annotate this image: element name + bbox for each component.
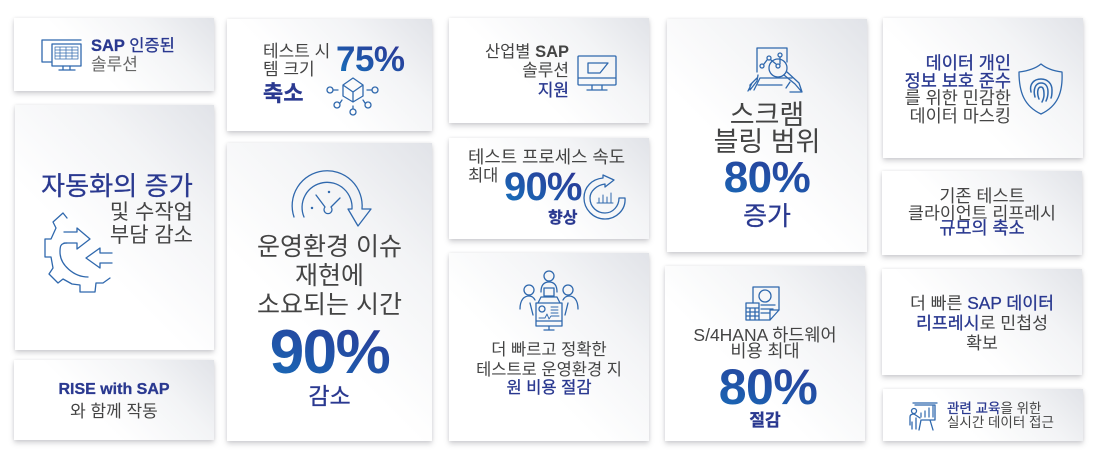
panel: faster SAP data refresh	[882, 269, 1082, 375]
panel: test process speed 90%	[449, 138, 649, 239]
text: 솔루션: 솔루션	[522, 61, 569, 80]
text: 테스트 프로세스 속도: 테스트 프로세스 속도	[468, 147, 625, 167]
text: 재현에: 재현에	[295, 262, 364, 290]
panel: test system size reduction 75%	[227, 19, 432, 131]
number: 80%	[668, 362, 868, 412]
text: 증가: 증가	[743, 201, 791, 231]
text: 기존 테스트: 기존 테스트	[939, 186, 1025, 206]
text: 데이터 마스킹: 데이터 마스킹	[910, 106, 1011, 126]
text: 및 수작업: 및 수작업	[110, 201, 193, 224]
icon: circular arrow with chart	[583, 174, 626, 220]
text: 운영환경 이슈: 운영환경 이슈	[257, 233, 402, 261]
text: 확보: 확보	[966, 333, 998, 353]
text: 와 함께 작동: 와 함께 작동	[70, 402, 158, 421]
panel: existing test client refresh	[882, 171, 1082, 255]
text: 데이터 개인: 데이터 개인	[926, 53, 1011, 73]
heading: 자동화의 증가: 자동화의 증가	[41, 171, 193, 201]
panel: issue reproduction time 90%	[227, 143, 432, 441]
number: 90%	[227, 322, 432, 384]
panel: S/4HANA hardware cost 80%	[665, 266, 865, 441]
text: 테스트 시: 테스트 시	[263, 42, 330, 61]
panel: real-time data access for training	[883, 389, 1083, 441]
panel: operations support cost savings	[449, 253, 649, 441]
icon: fingerprint shield	[1018, 63, 1063, 115]
text: 비용 최대: 비용 최대	[730, 341, 800, 361]
text: 실시간 데이터 접근: 실시간 데이터 접근	[947, 415, 1054, 430]
text: 더 빠른 SAP 데이터: 더 빠른 SAP 데이터	[910, 293, 1054, 313]
text: 블링 범위: 블링 범위	[714, 127, 820, 157]
number: 80%	[667, 156, 867, 200]
text: 테스트로 운영환경 지: 테스트로 운영환경 지	[476, 361, 622, 379]
icon: team around monitor	[519, 270, 579, 331]
text: 를 위한 민감한: 를 위한 민감한	[905, 88, 1011, 108]
text: 관련 교육을 위한: 관련 교육을 위한	[947, 401, 1041, 416]
text: 향상: 향상	[548, 210, 577, 227]
panel: sensitive data masking	[883, 18, 1083, 158]
text: 지원: 지원	[538, 81, 569, 100]
panel: scrum blur scope 80%	[667, 19, 867, 252]
icon: cube network	[326, 77, 379, 116]
text: 원 비용 절감: 원 비용 절감	[506, 379, 592, 397]
number: 80%: 80%	[724, 153, 810, 202]
number: 75%: 75%	[336, 40, 405, 79]
number: 90%: 90%	[504, 165, 582, 209]
icon: monitor	[577, 55, 617, 91]
text: 솔루션: 솔루션	[91, 55, 138, 74]
heading: RISE with SAP: RISE with SAP	[58, 381, 170, 398]
text: 최대: 최대	[468, 167, 498, 185]
panel: industry-specific SAP solutions	[449, 18, 649, 123]
text: 리프레시로 민첩성: 리프레시로 민첩성	[916, 313, 1048, 333]
text: 절감: 절감	[749, 411, 781, 430]
panel: SAP certified solution	[14, 18, 214, 91]
icon: invoice and calculator	[745, 286, 780, 321]
text: 산업별 SAP: 산업별 SAP	[485, 43, 569, 61]
panel: increased automation	[15, 105, 214, 350]
text: 템 크기: 템 크기	[263, 60, 315, 79]
heading: SAP 인증된: SAP 인증된	[91, 37, 175, 55]
panel: works with RISE with SAP	[14, 360, 214, 440]
text: 감소: 감소	[308, 383, 351, 409]
text: 정보 보호 준수: 정보 보호 준수	[905, 71, 1011, 91]
number: 80%: 80%	[719, 359, 817, 415]
text: S/4HANA 하드웨어: S/4HANA 하드웨어	[693, 325, 837, 345]
text: 축소: 축소	[263, 81, 303, 106]
text: 부담 감소: 부담 감소	[110, 224, 193, 247]
text: 소요되는 시간: 소요되는 시간	[257, 291, 402, 319]
text: 스크램: 스크램	[730, 100, 804, 130]
icon: gear with arrows	[44, 212, 113, 293]
text: 더 빠르고 정확한: 더 빠르고 정확한	[491, 341, 607, 359]
text: 클라이언트 리프레시: 클라이언트 리프레시	[908, 203, 1056, 223]
icon: tablet with magnifier	[747, 47, 803, 93]
text: 규모의 축소: 규모의 축소	[939, 218, 1025, 238]
icon: computer monitor	[41, 39, 82, 71]
icon: presenter with chart	[909, 402, 938, 431]
number: 90%: 90%	[270, 318, 389, 387]
icon: clock with arrow	[292, 170, 372, 227]
